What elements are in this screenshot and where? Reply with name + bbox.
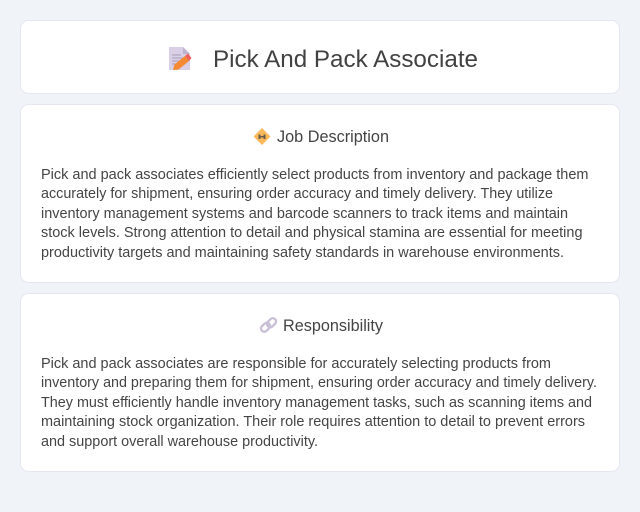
- text: job description body: inventory management systems and barcode scanners to track items and maintain: [41, 206, 568, 222]
- text: responsibility body: They must efficiently handle inventory management tasks, such as scanning items and: [41, 395, 592, 411]
- heading: job description: Job Description: [277, 128, 389, 146]
- text: job description body: productivity targets and maintaining safety standards in warehouse environments.: [41, 245, 564, 261]
- icon: document with pencil: [169, 47, 192, 70]
- panel: title header: [20, 20, 620, 94]
- icon: diamond road sign: [254, 128, 270, 145]
- text: job description body: stock levels. Strong attention to detail and physical stamina are essential for meeting: [41, 225, 582, 241]
- text: responsibility body: and support overall warehouse productivity.: [41, 434, 318, 450]
- text: job description body: Pick and pack associates efficiently select products from inventory and package them: [41, 167, 589, 183]
- text: responsibility body: maintaining stock organization. Their role requires attention to detail to prevent errors: [41, 414, 585, 430]
- text: responsibility body: Pick and pack associates are responsible for accurately selecting products from: [41, 356, 551, 372]
- heading: responsibility: Responsibility: [283, 317, 384, 335]
- text: responsibility body: [41, 356, 597, 450]
- text: job description body: [41, 167, 589, 261]
- text: responsibility body: inventory and preparing them for shipment, ensuring order accuracy and timely delivery.: [41, 375, 597, 391]
- panel: job description: [20, 104, 620, 282]
- text: job description body: accurately for shipment, ensuring order accuracy and timely delivery. They utilize: [41, 186, 553, 202]
- title: Pick And Pack Associate: [213, 46, 478, 73]
- icon: chain link: [260, 317, 277, 333]
- panel: responsibility: [20, 294, 620, 472]
